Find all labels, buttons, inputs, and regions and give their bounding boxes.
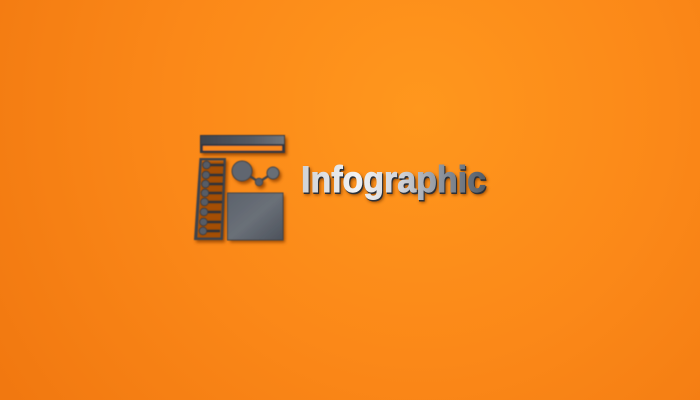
logo drop shadow	[196, 138, 287, 242]
wordmark shadow: Infographic	[303, 162, 488, 202]
wordmark face: Infographic	[301, 159, 486, 200]
abacus rods	[201, 165, 224, 231]
icon: connected dots	[232, 161, 279, 186]
icon: abacus	[194, 158, 226, 240]
wordmark	[301, 159, 488, 202]
wordmark depth: Infographic	[302, 160, 487, 202]
icon: top bar with slot	[200, 135, 285, 153]
abacus frame	[194, 158, 226, 240]
abacus beads	[199, 161, 210, 235]
logo mark	[194, 135, 287, 242]
icon: square panel	[228, 193, 283, 240]
